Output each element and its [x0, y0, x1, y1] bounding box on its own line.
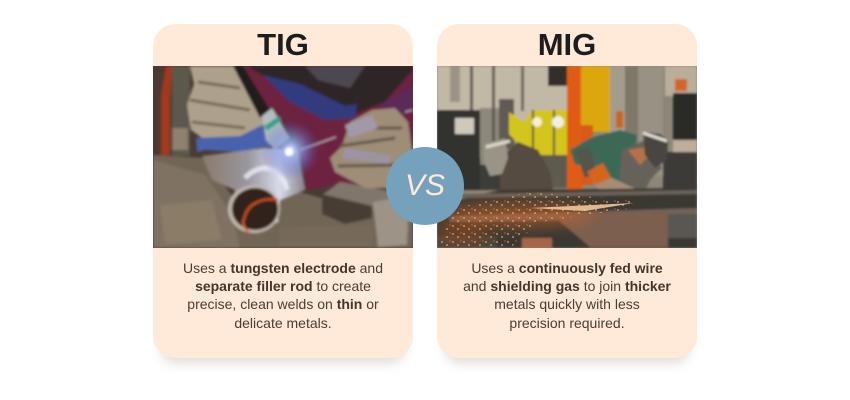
text: MIG description [463, 260, 671, 331]
text: TIG description: separate filler rod to create [195, 278, 371, 294]
heading: TIG: TIG [257, 27, 309, 62]
badge: VS circle [386, 147, 464, 225]
text: TIG description: precise, clean welds on thin or [187, 296, 379, 312]
blue cloth [196, 125, 270, 152]
torch [233, 66, 270, 118]
helmet [247, 66, 413, 115]
heading: MIG: MIG [538, 27, 596, 62]
cable [161, 66, 172, 155]
filler rod [300, 110, 413, 150]
back wall [437, 66, 567, 136]
bracket [322, 182, 405, 210]
pipe [202, 148, 305, 232]
badge: VS circle: VS [405, 169, 445, 202]
right glove [330, 108, 412, 188]
panel: TIG card [153, 24, 413, 358]
metal table [437, 188, 697, 248]
photo: MIG welders in a workshop with sparks [437, 66, 697, 248]
left welder [500, 142, 553, 190]
text: MIG description: and shielding gas to join thicker [463, 278, 671, 294]
text: MIG description: precision required. [509, 315, 625, 331]
text: MIG description: Uses a continuously fed wire [471, 260, 663, 276]
arc glow [260, 120, 320, 180]
right welder [570, 130, 637, 190]
photo: TIG welding on a steel pipe elbow [153, 66, 413, 248]
yellow machine [509, 110, 567, 155]
text: TIG description: Uses a tungsten electrode and [183, 260, 383, 276]
shirt [245, 66, 413, 190]
orange and yellow columns [567, 66, 582, 190]
text: TIG description [183, 260, 383, 331]
text: TIG description: delicate metals. [234, 315, 332, 331]
table [153, 155, 413, 248]
text: MIG description: metals quickly with less [494, 296, 640, 312]
electrical cabinet [437, 110, 480, 190]
panel: MIG card [437, 24, 697, 358]
left glove [187, 66, 268, 142]
sparks [432, 192, 634, 248]
